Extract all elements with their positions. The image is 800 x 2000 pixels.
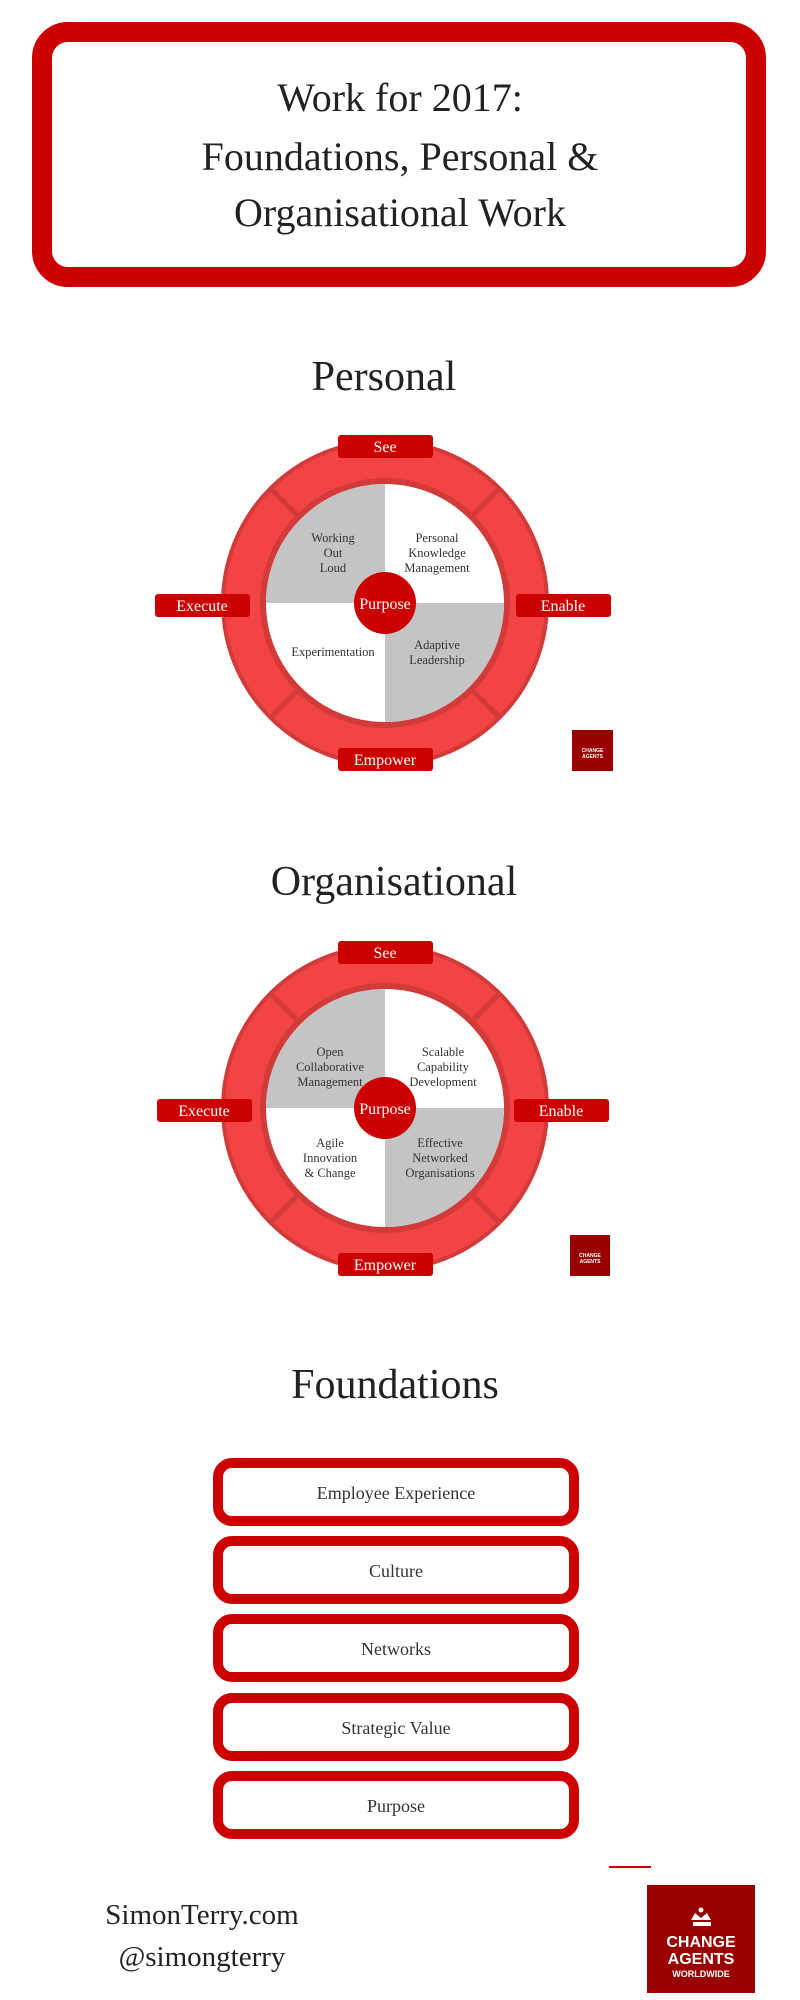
logo: change agents worldwide: WORLDWIDE xyxy=(672,1969,730,1979)
quadrant texts: Experimentation xyxy=(291,645,375,659)
wheel: organisational xyxy=(157,941,609,1276)
direction labels: Execute xyxy=(176,598,228,615)
quadrant texts xyxy=(296,1045,477,1180)
logo small personal: CHANGE xyxy=(582,748,604,754)
direction labels: Execute xyxy=(178,1103,230,1120)
quadrant texts: Working xyxy=(311,531,355,545)
foundations stack: Culture xyxy=(369,1561,423,1581)
purpose centre xyxy=(354,572,416,634)
wheel: personal: Purpose xyxy=(359,596,411,613)
footer credits xyxy=(105,1899,299,1973)
quadrant texts: Out xyxy=(324,546,343,560)
quadrant texts xyxy=(291,531,470,667)
logo small personal: AGENTS xyxy=(582,754,604,760)
direction labels: Enable xyxy=(541,598,585,615)
foundations stack: Strategic Value xyxy=(341,1718,451,1738)
quadrant texts: Development xyxy=(409,1075,477,1089)
quadrant texts: Agile xyxy=(316,1136,344,1150)
heading: Foundations: Foundations xyxy=(291,1362,499,1408)
quadrant texts: Capability xyxy=(417,1060,470,1074)
quadrant texts: Loud xyxy=(320,561,347,575)
logo small personal xyxy=(572,730,613,771)
direction labels: Empower xyxy=(354,1257,417,1274)
quadrant texts: Management xyxy=(404,561,470,575)
foundations stack xyxy=(218,1463,574,1834)
direction labels: Enable xyxy=(539,1103,583,1120)
wheel: personal xyxy=(155,435,611,771)
quadrant texts: Innovation xyxy=(303,1151,358,1165)
direction labels: Empower xyxy=(354,752,417,769)
logo: change agents worldwide: AGENTS xyxy=(668,1951,735,1968)
wheel: organisational: Purpose xyxy=(359,1101,411,1118)
logo: change agents worldwide xyxy=(647,1885,755,1993)
logo small organisational: AGENTS xyxy=(580,1259,601,1265)
quadrant texts: Organisations xyxy=(405,1166,475,1180)
logo small organisational: CHANGE xyxy=(579,1253,601,1259)
logo: change agents worldwide: CHANGE xyxy=(666,1934,736,1951)
purpose centre xyxy=(354,1077,416,1139)
quadrant texts: Effective xyxy=(417,1136,463,1150)
foundations stack: Purpose xyxy=(367,1796,425,1816)
footer credits: @simongterry xyxy=(119,1941,286,1973)
quadrant texts: Collaborative xyxy=(296,1060,364,1074)
direction labels xyxy=(155,435,611,771)
foundations stack: Networks xyxy=(361,1639,431,1659)
quadrant texts: Leadership xyxy=(409,653,465,667)
title box: Work for 2017: xyxy=(277,75,523,120)
quadrant texts: Personal xyxy=(415,531,459,545)
title box: Organisational Work xyxy=(234,190,566,235)
quadrant texts: Management xyxy=(297,1075,363,1089)
direction labels: See xyxy=(373,945,397,962)
quadrant texts: & Change xyxy=(304,1166,356,1180)
direction labels: See xyxy=(373,439,397,456)
quadrant texts: Open xyxy=(316,1045,344,1059)
logo small organisational xyxy=(570,1235,610,1276)
title box: Foundations, Personal & xyxy=(202,134,598,179)
heading: Personal: Personal xyxy=(312,354,456,400)
heading: Organisational: Organisational xyxy=(271,859,517,905)
footer credits: SimonTerry.com xyxy=(105,1899,299,1931)
quadrant texts: Adaptive xyxy=(414,638,460,652)
quadrant texts: Networked xyxy=(412,1151,469,1165)
foundations stack: Employee Experience xyxy=(317,1483,475,1503)
direction labels xyxy=(157,941,609,1276)
quadrant texts: Knowledge xyxy=(408,546,466,560)
title box xyxy=(42,32,756,277)
quadrant texts: Scalable xyxy=(422,1045,465,1059)
